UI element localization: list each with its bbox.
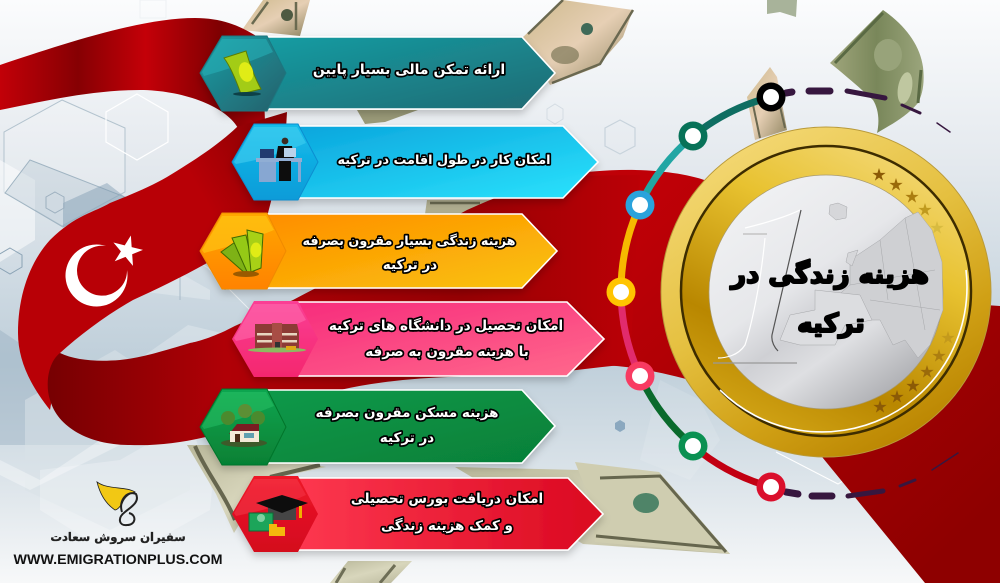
banknote: bottom left (187, 445, 326, 533)
banknote: bottom right hundred (455, 462, 730, 554)
banner 3 text: در ترکیه (383, 257, 437, 273)
banner 6 text: و کمک هزینه زندگی (381, 517, 513, 534)
banner 6 text (351, 491, 543, 534)
banknote: top small (767, 0, 797, 17)
banner 1 text: ارائه تمکن مالی بسیار پایین (313, 62, 505, 78)
timeline arc (606, 82, 958, 502)
icon: banknote (224, 51, 261, 96)
panel: banner 5 (200, 389, 555, 465)
banner 2 text: امکان کار در طول اقامت در ترکیه (337, 153, 551, 168)
coin white highlight arc (720, 270, 967, 432)
panel: banner 2 (232, 124, 598, 200)
icon: office worker at desk (256, 138, 302, 182)
ribbon lower band (48, 175, 640, 445)
banner 3 text (302, 233, 516, 273)
banner 6 body (280, 478, 603, 550)
euro coin (661, 127, 991, 457)
banknote: bottom centre (330, 561, 412, 583)
banner 4 body (280, 302, 604, 376)
banner 4 text (329, 317, 563, 360)
banner 1 body (245, 37, 555, 109)
star (109, 232, 146, 267)
icon: house with trees (221, 404, 267, 447)
timeline node 6 (678, 432, 708, 460)
panel: banner 1 (200, 36, 555, 111)
banner 4 text: با هزینه مقرون به صرفه (365, 344, 529, 360)
icon: university building (248, 323, 306, 352)
coin outer rim (661, 127, 991, 457)
icon: Turkish crescent and star (65, 232, 146, 307)
timeline coloured segments (621, 97, 771, 487)
coin numeral 1 (713, 210, 801, 363)
banner 6 hexagon (232, 476, 318, 552)
timeline node 7 (756, 472, 786, 502)
banknote: top centre (523, 0, 633, 85)
banner 3 text: هزینه زندگی بسیار مقرون بصرفه (302, 233, 516, 249)
banner 1 hexagon (200, 36, 286, 111)
banner 5 text: هزینه مسکن مقرون بصرفه (316, 405, 498, 421)
logo wing (97, 482, 135, 510)
ribbon loop band (18, 112, 287, 410)
banknote: top right curled green (830, 10, 924, 133)
logo name: سفیران سروش سعادت (50, 530, 186, 545)
panel: banner 3 (200, 213, 557, 289)
banknote: under first banner (357, 110, 418, 124)
banknote: under second banner (425, 200, 493, 214)
coin Europe map (780, 203, 943, 358)
panel: banner 6 (232, 476, 603, 552)
timeline node 3 (626, 190, 654, 220)
banknote: top left (242, 0, 310, 36)
timeline node 1 (756, 82, 786, 112)
timeline dashed top (786, 91, 950, 132)
timeline node 4 (606, 278, 636, 306)
coin silver centre (709, 175, 943, 409)
banner 3 hexagon (200, 213, 286, 289)
coin ring (681, 146, 971, 436)
banner 2 hexagon (232, 124, 318, 200)
banner 4 hexagon (232, 301, 318, 377)
logo swan (120, 493, 137, 525)
banknotes behind banners (187, 0, 924, 583)
banner 5 hexagon (200, 389, 286, 465)
icon: stack of banknotes (221, 230, 263, 277)
banner 2 body (280, 126, 598, 198)
banner 3 body (245, 214, 557, 288)
coin stars (872, 168, 955, 413)
banknote: behind timeline top (747, 67, 787, 140)
banner 6 text: امکان دریافت بورس تحصیلی (351, 491, 543, 507)
ribbon: Turkish red swoosh right part (560, 170, 1000, 583)
ribbon top band (0, 18, 265, 128)
timeline node 5 (626, 362, 654, 390)
banner 5 text: در ترکیه (380, 430, 434, 446)
banner 5 text (316, 405, 498, 446)
timeline dashed bottom (786, 453, 958, 496)
banner 4 text: امکان تحصیل در دانشگاه های ترکیه (329, 317, 563, 334)
coin title: هزینه زندگی در (729, 259, 929, 290)
timeline node 2 (678, 122, 708, 150)
icon: graduation cap and money (249, 495, 308, 536)
logo website: WWW.EMIGRATIONPLUS.COM (14, 552, 222, 568)
panel: banner 4 (232, 301, 604, 377)
logo (14, 482, 222, 568)
ribbon: Turkish red swoosh left part (0, 18, 640, 445)
banner 5 body (245, 390, 555, 463)
coin title: ترکیه (797, 309, 865, 339)
crescent (65, 245, 127, 307)
